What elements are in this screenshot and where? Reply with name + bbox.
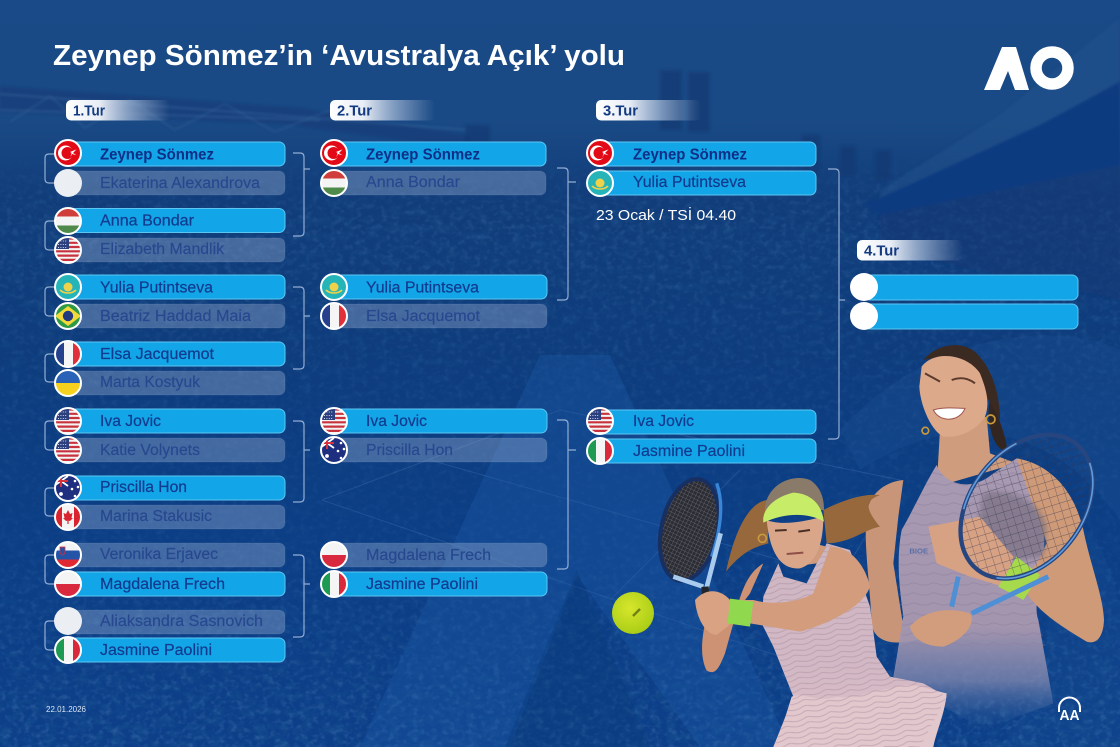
- player: Elizabeth Mandlik: [54, 236, 285, 264]
- player: Marta Kostyuk: Marta Kostyuk: [100, 374, 200, 391]
- round label: 3.Tur: [596, 100, 701, 120]
- player: Iva Jovic: Iva Jovic: [366, 413, 427, 430]
- player: Magdalena Frech: [320, 541, 547, 569]
- player: Yulia Putintseva: Yulia Putintseva: [633, 174, 746, 191]
- player: Magdalena Frech: [54, 570, 285, 598]
- round 4 empty slots: [850, 273, 1078, 330]
- player: Jasmine Paolini: Jasmine Paolini: [100, 642, 212, 659]
- player: Jasmine Paolini: [54, 636, 285, 664]
- player: Iva Jovic: [586, 407, 816, 435]
- player: Marina Stakusic: Marina Stakusic: [100, 508, 212, 525]
- player: Iva Jovic: [320, 407, 547, 435]
- player: Elsa Jacquemot: [320, 302, 547, 330]
- player: Jasmine Paolini: Jasmine Paolini: [366, 576, 478, 593]
- date: 22.01.2026: [46, 705, 87, 714]
- round label: 1.Tur: 1.Tur: [73, 104, 105, 120]
- player: Beatriz Haddad Maia: [54, 302, 285, 330]
- player: Zeynep Sönmez: Zeynep Sönmez: [100, 146, 214, 164]
- title: Zeynep Sönmez’in ‘Avustralya Açık’ yolu: [53, 40, 625, 72]
- player: Anna Bondar: Anna Bondar: [366, 174, 460, 191]
- player photo: Zeynep Sönmez hitting a backhand, front: [651, 474, 947, 747]
- player: Katie Volynets: Katie Volynets: [100, 442, 200, 459]
- player: Anna Bondar: Anna Bondar: [100, 212, 194, 230]
- player: Iva Jovic: [54, 407, 285, 435]
- player: Iva Jovic: Iva Jovic: [633, 413, 694, 430]
- logo: AA: AA: [1060, 707, 1080, 724]
- player: Magdalena Frech: Magdalena Frech: [366, 547, 491, 564]
- player: Jasmine Paolini: [586, 437, 816, 465]
- player: Ekaterina Alexandrova: [54, 169, 285, 197]
- slot: bottom: [850, 302, 1078, 330]
- player: Priscilla Hon: [54, 474, 285, 502]
- round label: 3.Tur: 3.Tur: [603, 104, 638, 120]
- player: Veronika Erjavec: [54, 541, 285, 570]
- logo: AA: [1059, 698, 1080, 724]
- round label: 4.Tur: 4.Tur: [864, 244, 899, 260]
- player: Jasmine Paolini: [320, 570, 547, 598]
- round label: 1.Tur: [66, 100, 170, 120]
- tennis ball: [612, 592, 654, 634]
- round label: 2.Tur: 2.Tur: [337, 104, 372, 120]
- player: Priscilla Hon: Priscilla Hon: [100, 479, 187, 496]
- player: Yulia Putintseva: [54, 273, 285, 301]
- slot: top: [850, 273, 1078, 301]
- connectors: round 2 to round 3: [557, 168, 576, 569]
- round 1 matches: [54, 139, 285, 664]
- player: Anna Bondar: [320, 169, 546, 198]
- player: Katie Volynets: [54, 436, 285, 464]
- player: Zeynep Sönmez: Zeynep Sönmez: [366, 146, 480, 164]
- round label: 2.Tur: [330, 100, 435, 120]
- player: Marina Stakusic: [54, 503, 285, 531]
- player photo: figure with racket, back right: BIOE: [909, 546, 928, 555]
- player: Veronika Erjavec: Veronika Erjavec: [100, 546, 218, 563]
- player: Yulia Putintseva: [320, 273, 547, 301]
- connectors: left pair brackets round 1: [45, 154, 56, 650]
- player: Zeynep Sönmez: [54, 139, 285, 167]
- player: Elsa Jacquemot: Elsa Jacquemot: [100, 346, 215, 363]
- player: Elsa Jacquemot: Elsa Jacquemot: [366, 308, 481, 325]
- connector: round 3 to round 4: [828, 169, 845, 439]
- round label: 4.Tur: [857, 240, 963, 260]
- player: Jasmine Paolini: Jasmine Paolini: [633, 443, 745, 460]
- player: Zeynep Sönmez: [586, 139, 816, 167]
- player: Iva Jovic: Iva Jovic: [100, 413, 161, 430]
- player: Beatriz Haddad Maia: Beatriz Haddad Maia: [100, 308, 251, 325]
- player photo: figure with racket, back right: [866, 345, 1120, 730]
- player: Zeynep Sönmez: Zeynep Sönmez: [633, 146, 747, 164]
- round 3 matches: [586, 139, 816, 465]
- player: Ekaterina Alexandrova: Ekaterina Alexandrova: [100, 175, 260, 192]
- player: Anna Bondar: [54, 207, 285, 236]
- player: Elsa Jacquemot: [54, 340, 285, 368]
- player: Marta Kostyuk: [54, 369, 285, 397]
- player: Elizabeth Mandlik: Elizabeth Mandlik: [100, 241, 224, 258]
- player: Yulia Putintseva: Yulia Putintseva: [100, 280, 213, 296]
- match time: 23 Ocak / TSİ 04.40: [596, 206, 736, 224]
- player: Aliaksandra Sasnovich: Aliaksandra Sasnovich: [100, 613, 263, 630]
- player: Yulia Putintseva: Yulia Putintseva: [366, 280, 479, 296]
- player: Aliaksandra Sasnovich: [54, 607, 285, 635]
- player: Yulia Putintseva: [586, 169, 816, 197]
- player: Priscilla Hon: [320, 436, 547, 464]
- player: Magdalena Frech: Magdalena Frech: [100, 576, 225, 593]
- connectors: round 1 to round 2: [293, 153, 310, 637]
- player: Zeynep Sönmez: [320, 139, 546, 167]
- logo: Australian Open AO: [984, 47, 1068, 90]
- player: Priscilla Hon: Priscilla Hon: [366, 442, 453, 459]
- round 2 matches: [320, 139, 547, 598]
